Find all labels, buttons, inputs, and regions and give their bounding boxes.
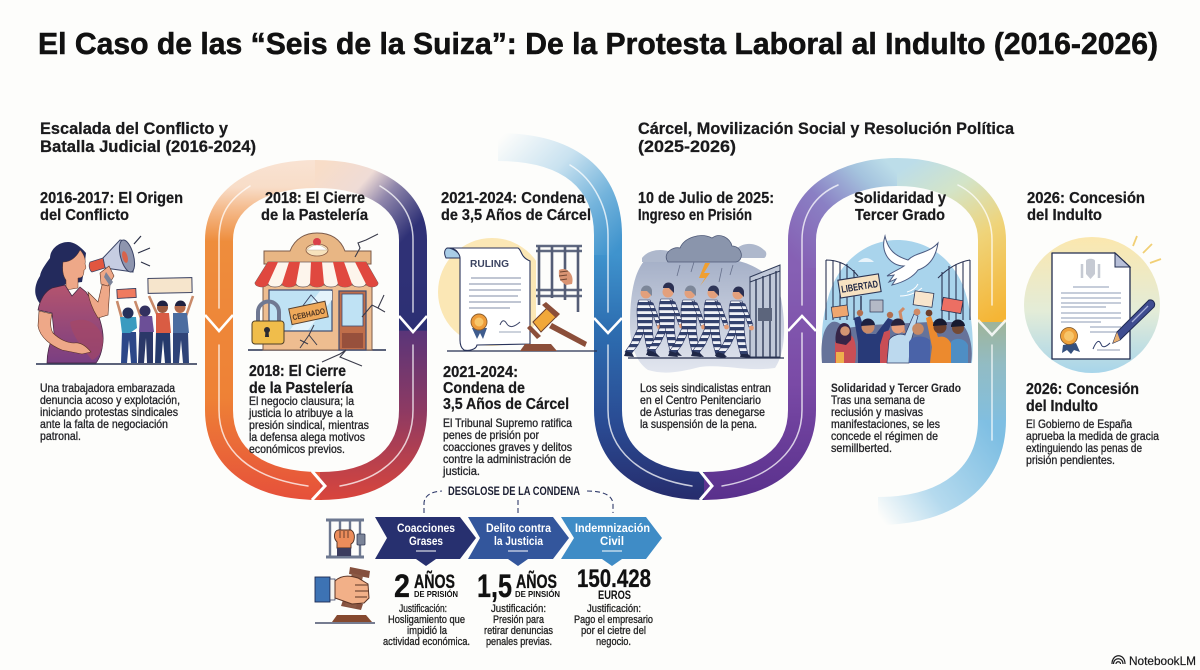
title: El Caso de las “Seis de la Suiza”: De la Protesta Laboral al Indulto (2016-2026)	[38, 27, 1158, 61]
text: origen: Una trabajadora embarazada	[40, 381, 175, 395]
heading: condena	[441, 190, 591, 224]
text: condena: justicia.	[442, 464, 480, 478]
text: cierre: El negocio clausura; la	[249, 394, 354, 408]
icon: prisoners walking into prison under storm	[624, 236, 784, 373]
icon: closed pastry shop	[248, 233, 386, 366]
text: cierre: económicos previos.	[249, 442, 345, 456]
text: cierre: la defensa alega motivos	[249, 430, 365, 444]
text: cierre: de la Pastelería	[249, 380, 353, 397]
text: ingreso: la suspensión de la pena.	[640, 417, 757, 431]
stat: 150.428 euros	[574, 565, 653, 648]
stat: 1,5 anos de prision: Presión para	[493, 614, 545, 626]
stat: 2 anos de prision	[383, 568, 470, 648]
heading: origen: del Conflicto	[40, 207, 129, 224]
text: indulto: 2026: Concesión	[1026, 381, 1139, 398]
stat: 150.428 euros: por el cietre del	[581, 625, 646, 637]
stat: 1,5 anos de prision	[477, 568, 560, 648]
text: ingreso: Los seis sindicalistas entran	[640, 381, 771, 395]
chevron: delito contra la justicia: Delito contra	[486, 521, 551, 535]
breakdown heading with dashed bracket: DESGLOSE DE LA CONDENA	[448, 486, 580, 498]
text: solidaridad: semillberted.	[831, 441, 892, 455]
heading: condena: 2021-2024: Condena	[441, 190, 585, 207]
heading: origen	[40, 190, 183, 224]
chevron: coacciones graves: Grases	[409, 534, 443, 548]
text: condena: El Tribunal Supremo ratifica	[443, 416, 572, 430]
chevron: indemnizacion civil: Civil	[600, 534, 624, 548]
heading: cierre: de la Pastelería	[261, 207, 368, 224]
text: indulto: extinguiendo las penas de	[1026, 441, 1142, 455]
text: cierre	[248, 363, 369, 456]
text: origen: ante la falta de negociación	[40, 417, 168, 431]
stat: 1,5 anos de prision: Justificación:	[491, 603, 546, 615]
text: indulto	[1026, 381, 1159, 467]
icon: court ruling with cell bars and gavel: RULING	[470, 258, 509, 270]
stat: 1,5 anos de prision: retirar denuncias	[484, 625, 553, 637]
text: condena	[442, 364, 572, 478]
text: condena: 2021-2024:	[443, 364, 518, 381]
icon: freedom crowd with dove and open gates	[821, 236, 973, 363]
text: origen: patronal.	[40, 429, 81, 443]
stat: 150.428 euros: Pago el empresario	[574, 614, 653, 626]
text: condena: coacciones graves y delitos	[443, 440, 572, 454]
text: origen	[40, 381, 180, 443]
text: indulto: prisión pendientes.	[1026, 453, 1115, 467]
icon: pregnant woman with megaphone and protesters	[35, 236, 197, 364]
stat: 1,5 anos de prision: penales previas.	[486, 636, 552, 648]
icon: freedom crowd with dove and open gates: LIBERTAD	[841, 279, 879, 296]
heading: indulto: 2026: Concesión	[1027, 190, 1145, 207]
text: indulto: del Indulto	[1026, 398, 1098, 415]
text: condena: Condena de	[443, 380, 525, 397]
stat: 2 anos de prision: Hosligamiento que	[388, 614, 465, 626]
icon: closed pastry shop: CEBHADO	[292, 307, 326, 322]
heading: ingreso: Ingreso en Prisión	[638, 207, 752, 224]
breakdown heading with dashed bracket	[424, 486, 613, 513]
icon: pardon document with seal and pen	[1024, 236, 1161, 373]
text: condena: 3,5 Años de Cárcel	[443, 396, 569, 413]
heading: cierre	[261, 190, 368, 224]
stat: 2 anos de prision: actividad económica.	[383, 636, 470, 648]
text: ingreso	[640, 381, 771, 431]
text: indulto: El Gobierno de España	[1026, 417, 1132, 431]
text: cierre: justicia lo atribuye a la	[248, 406, 353, 420]
text: condena: contre la administración de	[443, 452, 571, 466]
text: solidaridad: Tras una semana de	[831, 393, 925, 407]
chevron: delito contra la justicia: la Justicia	[494, 534, 543, 548]
stat: 150.428 euros: EUROS	[598, 590, 631, 602]
icon: court ruling with cell bars and gavel	[438, 238, 597, 351]
section heading: carcel: Cárcel, Movilización Social y Resolución Política	[638, 119, 1015, 138]
heading: solidaridad	[854, 190, 946, 224]
notebooklm logo: NotebookLM	[1129, 654, 1196, 668]
section heading: escalada: Batalla Judicial (2016-2024)	[40, 137, 256, 156]
text: solidaridad: reciusión y masivas	[831, 405, 923, 419]
heading: ingreso: 10 de Julio de 2025:	[638, 190, 774, 207]
heading: solidaridad: Solidaridad y	[854, 190, 946, 207]
icon: fist behind bars	[326, 520, 365, 557]
section heading: carcel	[638, 119, 1015, 156]
text: cierre: 2018: El Cierre	[249, 363, 346, 380]
section heading: carcel: (2025-2026)	[638, 137, 736, 156]
text: solidaridad: Solidaridad y Tercer Grado	[831, 381, 961, 395]
heading: ingreso	[638, 190, 774, 224]
stat: 150.428 euros: negocio.	[596, 636, 631, 648]
text: origen: iniciando protestas sindicales	[40, 405, 178, 419]
stat: 1,5 anos de prision: DE PINSIÓN	[515, 588, 560, 599]
section heading: escalada: Escalada del Conflicto y	[40, 119, 229, 138]
chevron: coacciones graves	[375, 517, 476, 566]
chevron: delito contra la justicia	[468, 517, 569, 566]
text: solidaridad	[831, 381, 961, 455]
text: origen: denuncia acoso y explotación,	[40, 393, 180, 407]
text: indulto: aprueba la medida de gracia	[1026, 429, 1159, 443]
heading: cierre: 2018: El Cierre	[265, 190, 365, 207]
serpentine timeline ribbon	[205, 147, 1006, 511]
icon: hand holding gavel	[315, 567, 375, 623]
heading: origen: 2016-2017: El Origen	[40, 190, 183, 207]
chevron: indemnizacion civil	[561, 517, 662, 566]
text: solidaridad: manifestaciones, se les	[831, 417, 940, 431]
heading: condena: de 3,5 Años de Cárcel	[441, 207, 591, 224]
stat: 150.428 euros: Justificación:	[587, 603, 641, 615]
stat: 2 anos de prision: DE PRISIÓN	[414, 588, 458, 599]
section heading: escalada	[40, 119, 256, 156]
text: ingreso: en el Centro Penitenciario	[640, 393, 761, 407]
heading: indulto	[1027, 190, 1145, 224]
stat: 1,5 anos de prision: AÑOS	[516, 571, 557, 593]
stat: 2 anos de prision: Justificación:	[399, 603, 447, 615]
stat: 150.428 euros: 150.428	[577, 565, 651, 593]
text: cierre: presión sindical, mientras	[249, 418, 369, 432]
chevron: coacciones graves: Coacciones	[397, 521, 455, 535]
text: solidaridad: concede el régimen de	[831, 429, 938, 443]
chevron: indemnizacion civil: Indemnización	[575, 521, 650, 535]
stat: 2 anos de prision: impidió la	[407, 625, 448, 637]
stat: 1,5 anos de prision: 1,5	[477, 568, 512, 604]
text: ingreso: de Asturias tras denegarse	[640, 405, 765, 419]
text: condena: penes de prisión por	[443, 428, 539, 442]
heading: solidaridad: Tercer Grado	[855, 207, 945, 224]
stat: 2 anos de prision: 2	[394, 568, 410, 604]
stat: 2 anos de prision: AÑOS	[414, 571, 455, 593]
heading: indulto: del Indulto	[1027, 207, 1102, 224]
